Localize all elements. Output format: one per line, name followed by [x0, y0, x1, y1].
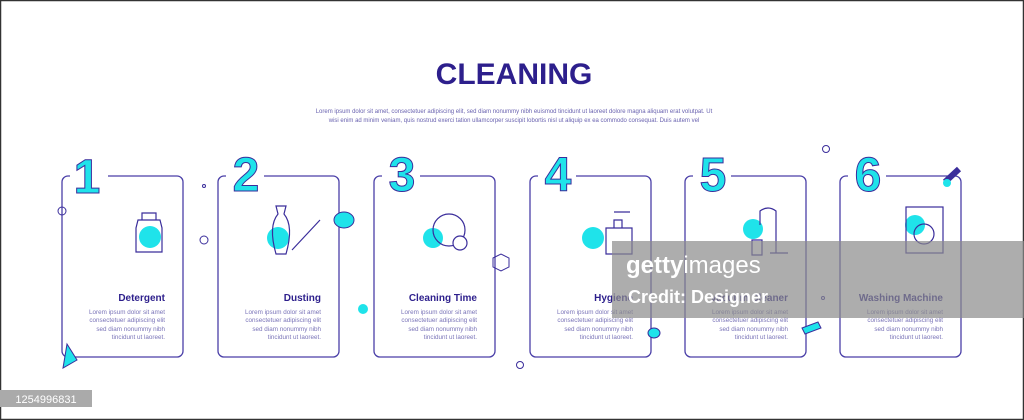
panel: step 6 washing machine [840, 149, 961, 357]
panel: step 1 detergent: sed diam nonummy nibh [96, 326, 165, 333]
panel: step 6 washing machine: consectetuer adipiscing elit [867, 317, 943, 324]
panel: step 3 cleaning time: sed diam nonummy nibh [408, 326, 477, 333]
panel: step 3 cleaning time: Cleaning Time [409, 293, 477, 304]
panel: step 5 vacuum cleaner: consectetuer adipiscing elit [712, 317, 788, 324]
panel: step 6 washing machine: tincidunt ut laoreet. [890, 334, 943, 341]
panel: step 4 hygiene: consectetuer adipiscing elit [557, 317, 633, 324]
panel: step 5 vacuum cleaner: Vacuum Cleaner [710, 293, 788, 304]
panel: step 4 hygiene [530, 149, 651, 357]
panel: step 2 dusting: Lorem ipsum dolor sit amet [245, 309, 321, 316]
subtitle text: Lorem ipsum dolor sit amet, consectetuer adipiscing elit, sed diam nonummy nibh euismod tincidunt ut laoreet dolore magna aliquam erat volutpat. Ut [316, 109, 713, 115]
panel: step 5 vacuum cleaner: 5 [700, 149, 726, 202]
title: CLEANING [436, 58, 592, 91]
panel: step 6 washing machine: sed diam nonummy nibh [874, 326, 943, 333]
panel: step 3 cleaning time: consectetuer adipiscing elit [401, 317, 477, 324]
panel: step 4 hygiene: Hygiene [594, 293, 633, 304]
panel: step 2 dusting: Dusting [284, 293, 321, 304]
panel: step 6 washing machine: 6 [855, 149, 881, 202]
panel: step 4 hygiene: Lorem ipsum dolor sit amet [557, 309, 633, 316]
panel: step 1 detergent: Detergent [118, 293, 166, 304]
panel: step 2 dusting: sed diam nonummy nibh [252, 326, 321, 333]
panel: step 1 detergent: consectetuer adipiscing elit [89, 317, 165, 324]
panel: step 5 vacuum cleaner: sed diam nonummy nibh [719, 326, 788, 333]
panel: step 1 detergent: 1 [74, 151, 100, 204]
panel: step 2 dusting: 2 [233, 149, 259, 202]
panel: step 5 vacuum cleaner: Lorem ipsum dolor sit amet [712, 309, 788, 316]
panel: step 6 washing machine: Washing Machine [859, 293, 943, 304]
panel: step 3 cleaning time: 3 [389, 149, 415, 202]
panel: step 4 hygiene: sed diam nonummy nibh [564, 326, 633, 333]
subtitle text [316, 109, 713, 124]
panel: step 4 hygiene: 4 [545, 149, 572, 202]
panel: step 3 cleaning time: Lorem ipsum dolor sit amet [401, 309, 477, 316]
watermark band: gettyimages [626, 252, 761, 279]
panel: step 1 detergent: tincidunt ut laoreet. [112, 334, 165, 341]
decorative shapes [58, 146, 959, 368]
image id label: 1254996831 [15, 394, 77, 406]
panel: step 3 cleaning time [374, 149, 495, 357]
subtitle text: wisi enim ad minim veniam, quis nostrud exerci tation ullamcorper suscipit lobortis nisl ut aliquip ex ea commodo consequat. Duis autem vel [328, 118, 699, 124]
watermark band: Credit: Designer [628, 287, 768, 307]
panel: step 2 dusting [218, 149, 339, 357]
panel: step 6 washing machine: Lorem ipsum dolor sit amet [867, 309, 943, 316]
watermark band [612, 241, 1024, 318]
panel: step 5 vacuum cleaner: tincidunt ut laoreet. [735, 334, 788, 341]
panel: step 1 detergent [62, 151, 183, 357]
panel: step 4 hygiene: tincidunt ut laoreet. [580, 334, 633, 341]
panel: step 5 vacuum cleaner [685, 149, 806, 357]
panel: step 3 cleaning time: tincidunt ut laoreet. [424, 334, 477, 341]
panel: step 2 dusting: consectetuer adipiscing elit [245, 317, 321, 324]
panel: step 1 detergent: Lorem ipsum dolor sit amet [89, 309, 165, 316]
panel: step 2 dusting: tincidunt ut laoreet. [268, 334, 321, 341]
image id label [0, 390, 92, 407]
